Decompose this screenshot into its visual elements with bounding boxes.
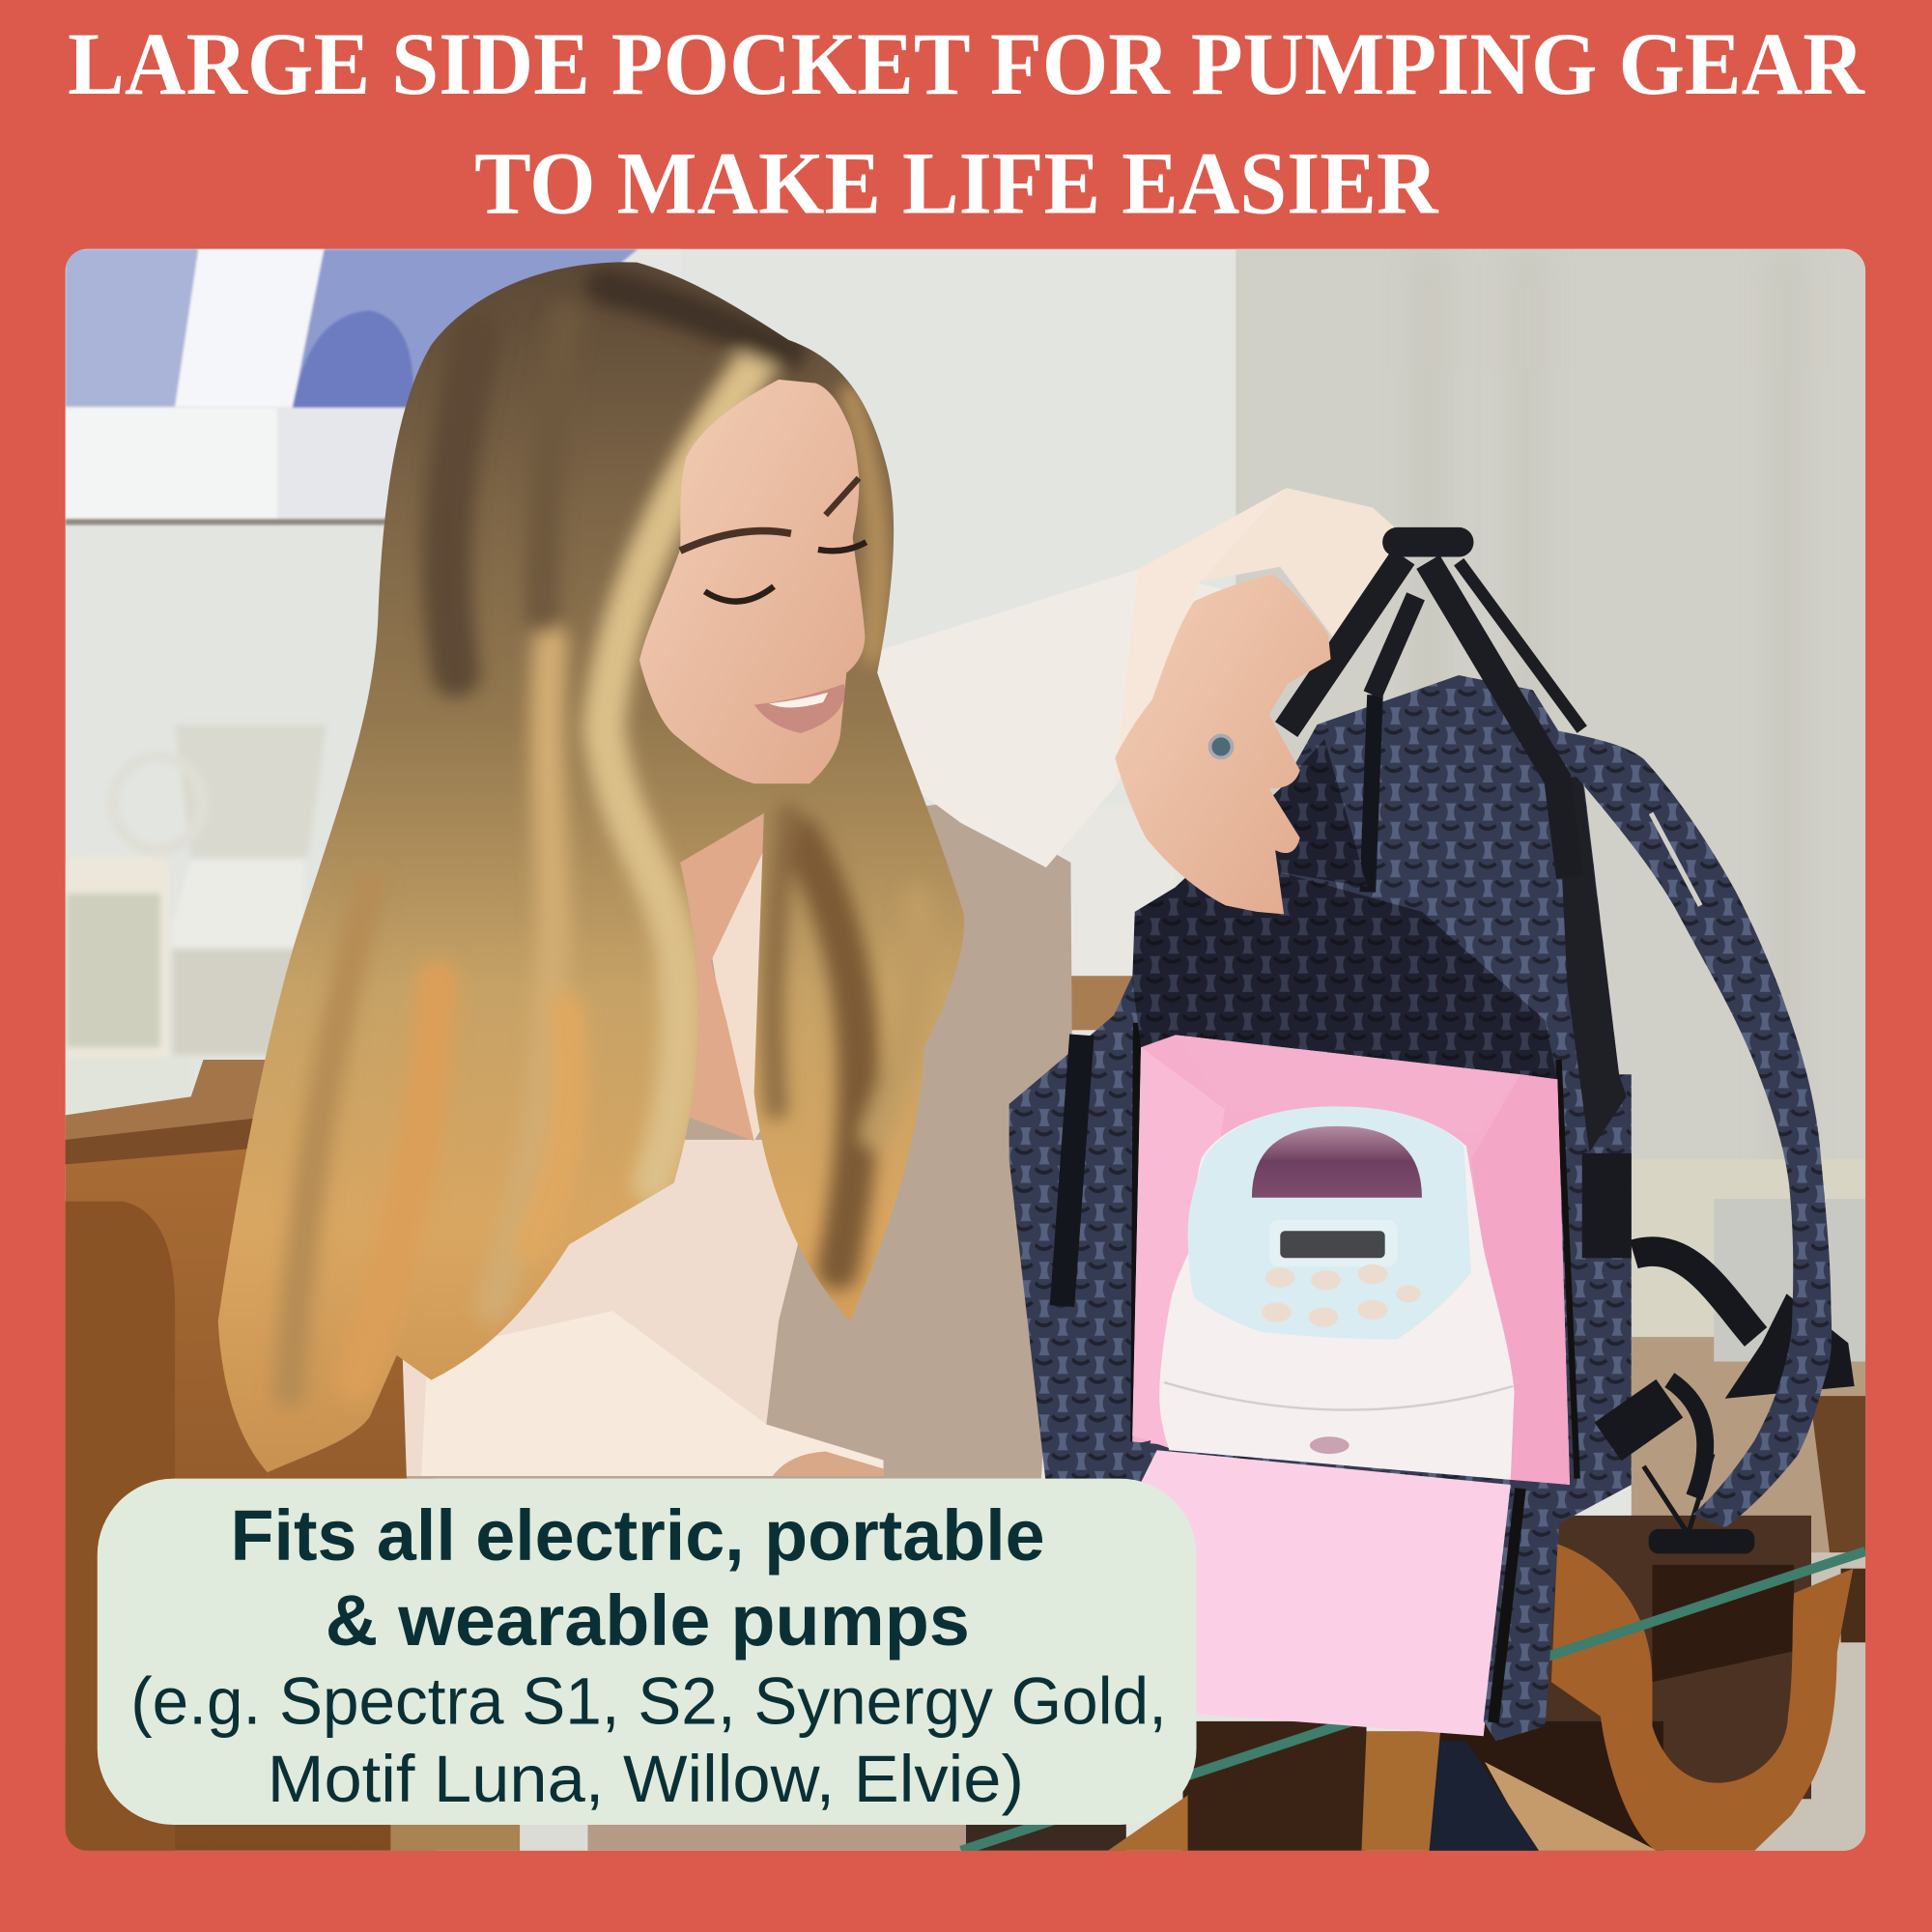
pink pocket interior [1132, 1035, 1570, 1485]
hand holding flap [1115, 574, 1331, 914]
ceramic vase and shelf objects [66, 724, 327, 1115]
callout heading [231, 1495, 1045, 1661]
callout: pump compatibility [98, 1479, 1197, 1825]
open pink pocket flap [1103, 1440, 1560, 1741]
wall art [66, 249, 681, 525]
backpack pocket flap [1132, 739, 1557, 1079]
shirt [397, 488, 1406, 1479]
backpack top handles [1287, 542, 1582, 877]
title: LARGE SIDE POCKET FOR PUMPING GEAR [68, 14, 1865, 113]
face [639, 380, 867, 783]
ring [1210, 735, 1233, 757]
hair [218, 262, 964, 1472]
table and wood arches [959, 1199, 1866, 1851]
backpack body [1009, 675, 1632, 1528]
wooden cabinet [66, 976, 1132, 1851]
callout heading: Fits all electric, portable [231, 1495, 1045, 1576]
title: TO MAKE LIFE EASIER [474, 134, 1439, 233]
callout examples: (e.g. Spectra S1, S2, Synergy Gold, [130, 1663, 1167, 1738]
callout examples: Motif Luna, Willow, Elvie) [268, 1742, 1024, 1816]
wall and curtain [66, 249, 1865, 1851]
backpack shoulder strap [1551, 729, 1832, 1528]
title [68, 14, 1865, 233]
callout heading: & wearable pumps [326, 1580, 970, 1661]
callout examples [130, 1663, 1167, 1816]
breast pump [1159, 1106, 1515, 1480]
photo panel: woman opening backpack side pocket [66, 249, 1865, 1851]
lower black straps and buckle [1608, 1252, 1855, 1553]
neck and chest [680, 813, 764, 1141]
